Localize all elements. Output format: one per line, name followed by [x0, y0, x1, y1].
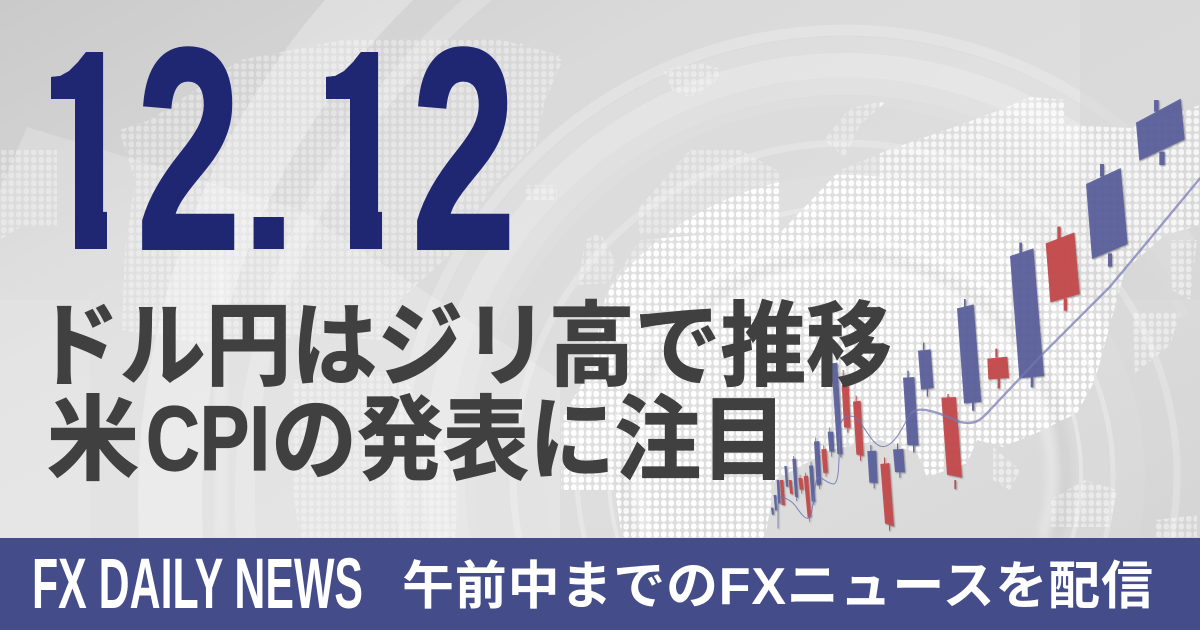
headline	[34, 296, 892, 492]
headline line 2: の発表に注目	[271, 390, 787, 492]
digit 2 second: 2	[412, 0, 515, 310]
red candles	[780, 227, 1080, 531]
digit 2: 2	[137, 0, 240, 310]
headline line 1: ドル円はジリ高で推移	[34, 296, 892, 398]
globe highlight ring	[627, 257, 1063, 538]
candlestick chart	[771, 99, 1200, 531]
blue candles	[771, 99, 1185, 528]
headline line 2	[47, 388, 787, 492]
headline line 2: 米	[47, 390, 139, 492]
headline line 2: CPI	[146, 388, 270, 490]
moving average line	[780, 178, 1200, 518]
footer tagline: 午前中までのFXニュースを配信	[402, 558, 1153, 616]
date	[51, 46, 510, 250]
digit 1: 1	[29, 0, 132, 311]
footer bar	[0, 538, 1200, 630]
dot: .	[239, 56, 299, 295]
digit 1 second: 1	[304, 0, 407, 311]
footer brand: FX DAILY NEWS	[32, 545, 363, 624]
